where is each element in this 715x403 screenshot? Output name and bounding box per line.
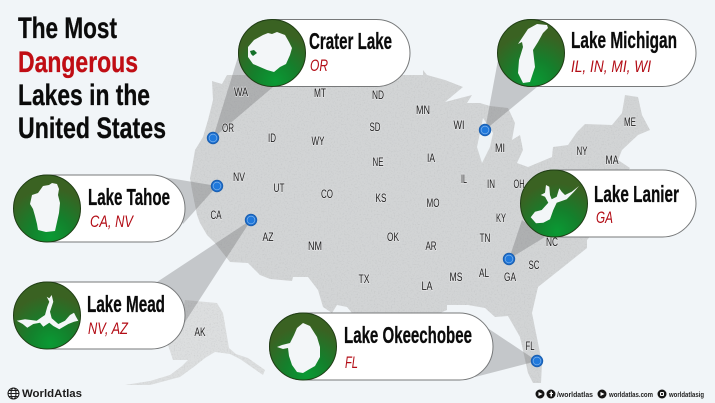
state labels: LA: [422, 279, 432, 293]
state labels: OR: [222, 121, 234, 135]
state labels: GA: [504, 270, 516, 284]
state labels: IA: [427, 151, 435, 165]
state labels: ND: [372, 88, 384, 102]
state labels: WA: [234, 85, 248, 99]
state labels: NV: [233, 170, 245, 184]
panel: Crater Lake: Crater Lake: [309, 28, 392, 54]
panel: Lake Michigan: [498, 20, 696, 86]
social links: worldatlas.com: [608, 390, 653, 399]
state labels: UT: [274, 181, 285, 195]
Lake Michigan on the map: [477, 118, 493, 163]
state labels: ME: [624, 115, 636, 129]
panel: Crater Lake: OR: [310, 56, 328, 75]
map of the United States: [125, 70, 650, 385]
panel: Lake Lanier: [520, 170, 696, 237]
state labels: [194, 85, 636, 353]
state labels: MA: [606, 153, 618, 167]
icon: Crater Lake outline: [248, 32, 292, 72]
state labels: SC: [528, 258, 540, 272]
state labels: NC: [546, 235, 558, 249]
icon: Lake Tahoe outline: [30, 183, 60, 232]
panel: Lake Okeechobee: FL: [345, 353, 358, 372]
state labels: SD: [370, 120, 381, 134]
icon: Lake Mead outline: [17, 295, 78, 329]
state labels: KS: [376, 191, 386, 205]
state labels: NE: [372, 155, 384, 169]
state labels: NM: [308, 239, 322, 253]
state labels: MS: [450, 270, 462, 284]
title: United States: [18, 112, 166, 145]
panel: Lake Michigan: IL, IN, MI, WI: [571, 57, 651, 76]
state labels: TX: [358, 272, 370, 286]
icon: globe: [8, 388, 19, 399]
social links: [536, 390, 704, 399]
panel: Lake Mead: Lake Mead: [87, 291, 165, 317]
panel: Lake Tahoe: Lake Tahoe: [88, 184, 170, 210]
state labels: IL: [461, 172, 467, 186]
icon: Lake Lanier outline: [531, 185, 579, 223]
social links: worldatlasig: [668, 390, 704, 399]
panel: Lake Mead: NV, AZ: [88, 319, 128, 338]
state labels: IN: [487, 177, 495, 191]
panel: Lake Tahoe: [14, 175, 185, 242]
panel: Lake Mead: [14, 282, 185, 349]
panel: Lake Okeechobee: [270, 313, 493, 380]
state labels: MN: [416, 103, 430, 117]
panel: Lake Tahoe: CA, NV: [90, 212, 134, 231]
state labels: TN: [480, 231, 490, 245]
location markers: [207, 124, 543, 367]
state labels: MT: [314, 86, 326, 100]
icon: Lake Okeechobee outline: [277, 323, 320, 373]
state labels: CO: [321, 187, 333, 201]
Alaska: [125, 300, 265, 385]
state labels: CA: [210, 208, 222, 222]
state labels: AR: [426, 239, 437, 253]
state labels: KY: [496, 211, 506, 225]
state labels: ID: [268, 131, 276, 145]
state labels: AL: [479, 266, 489, 280]
WorldAtlas logo: WorldAtlas: [22, 388, 82, 400]
state labels: OK: [387, 230, 399, 244]
state labels: MI: [495, 141, 505, 155]
contiguous states: [190, 70, 650, 383]
state labels: OH: [514, 177, 524, 191]
state labels: WI: [454, 118, 464, 132]
state labels: NY: [576, 144, 588, 158]
state labels: FL: [526, 339, 535, 353]
icon: Lake Michigan outline: [518, 24, 548, 83]
title: [18, 12, 166, 145]
title: Lakes in the: [18, 79, 150, 112]
panel: Crater Lake: [238, 20, 410, 86]
state labels: MO: [426, 196, 440, 210]
title: The Most: [18, 12, 117, 45]
title: Dangerous: [18, 46, 138, 79]
panel: Lake Lanier: GA: [596, 208, 613, 227]
social links: /worldatlas: [557, 390, 593, 399]
state labels: AZ: [262, 230, 274, 244]
panel: Lake Okeechobee: Lake Okeechobee: [344, 322, 472, 348]
state labels: WY: [312, 134, 324, 148]
callout wedges: [157, 57, 545, 377]
state labels: AK: [194, 325, 206, 339]
